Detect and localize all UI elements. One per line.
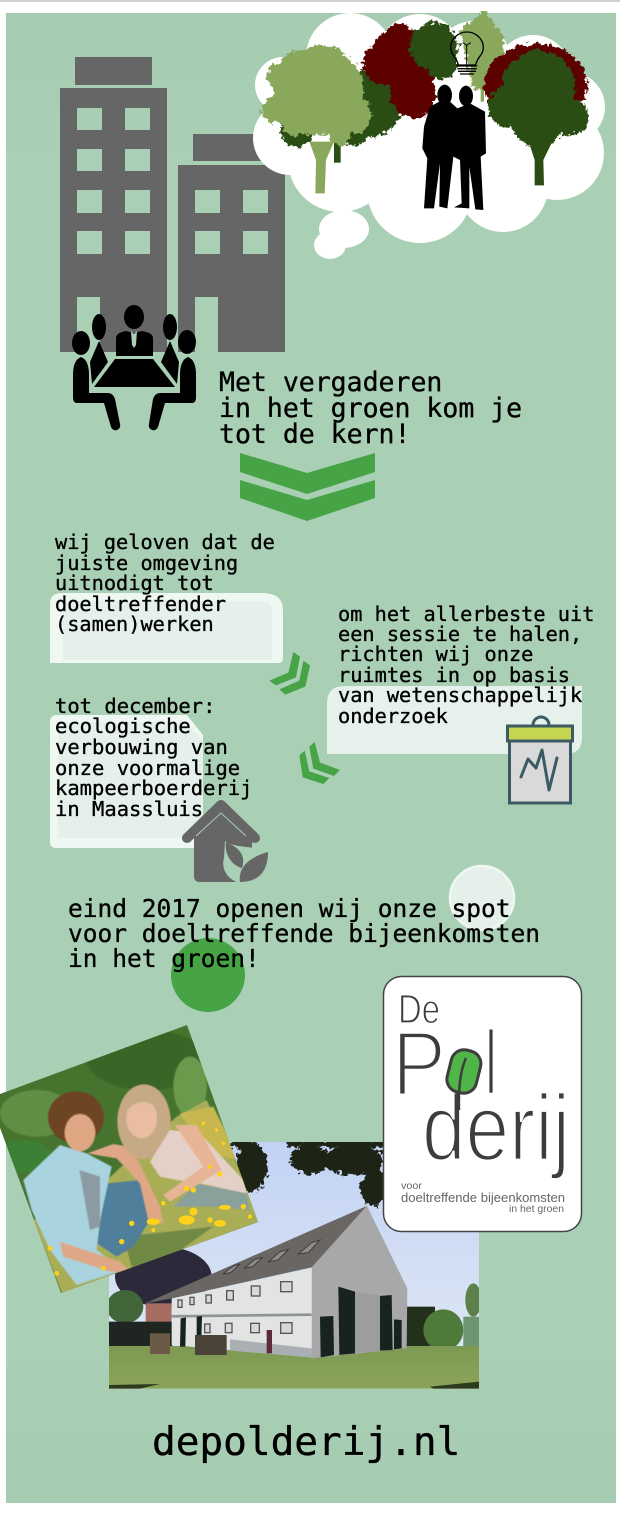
logo letter: P: P [392, 1013, 446, 1115]
text block: wetenschappelijk onderzoek: onderzoek [338, 704, 448, 728]
tree: dark red [363, 23, 436, 118]
windows [178, 1282, 292, 1333]
icon: eco house [187, 805, 268, 883]
text block: opening: in het groen! [68, 944, 260, 973]
logo tagline [401, 1181, 565, 1215]
tree: dark red right [484, 43, 588, 127]
arrow: small chevron right-down [269, 652, 310, 695]
text block: wetenschappelijk onderzoek: richten wij onze [338, 642, 533, 666]
tree: light green conifer [460, 11, 505, 102]
man's arms [87, 1144, 163, 1223]
tree: dark green top [410, 22, 458, 79]
decorative circle: green [171, 938, 245, 1012]
text block: verbouwing: onze voormalige [55, 756, 240, 780]
text block: verbouwing: in Maassluis [55, 797, 203, 821]
dark doors [180, 1287, 402, 1357]
logo word: De: De [398, 986, 440, 1032]
photo: farmhouse [107, 1140, 481, 1389]
roof lights [223, 1240, 320, 1274]
text block: juiste omgeving: doeltreffender [55, 592, 226, 616]
top [150, 1130, 247, 1193]
website url: depolderij.nl [152, 1419, 460, 1465]
heading: Met vergaderen [219, 367, 442, 398]
flowers [48, 1122, 252, 1276]
foliage top [230, 1140, 386, 1207]
text block: juiste omgeving: juiste omgeving [55, 551, 238, 575]
photo: couple in meadow [0, 1025, 258, 1293]
callout background: verbouwing [50, 715, 203, 848]
man's hair [48, 1091, 104, 1143]
tree: light green front [262, 46, 372, 193]
text block: opening [68, 894, 540, 973]
lawn [109, 1346, 479, 1389]
tree: dark green back left [280, 70, 403, 163]
text block: opening: voor doeltreffende bijeenkomsten [68, 919, 540, 948]
brick annex and fence [109, 1303, 172, 1347]
text block: juiste omgeving: wij geloven dat de [55, 530, 275, 554]
figures [23, 1084, 250, 1285]
icon: meeting around a table [72, 305, 196, 430]
heading [219, 367, 522, 450]
text block: wetenschappelijk onderzoek: een sessie te halen, [338, 622, 582, 646]
heading: in het groen kom je [219, 393, 522, 424]
roof [145, 1206, 367, 1303]
long white wall [172, 1268, 312, 1357]
hedge [406, 1306, 479, 1346]
silhouette: two men [422, 85, 486, 210]
illustration: trees, men and light bulb [262, 11, 589, 210]
logo tagline: in het groen [509, 1203, 564, 1215]
woman's face [126, 1098, 157, 1138]
callout background: samenwerken [50, 593, 283, 663]
shirt [23, 1145, 123, 1285]
people and terrace [150, 1330, 272, 1355]
text block: wetenschappelijk onderzoek: van wetenschappelijk [338, 683, 582, 707]
text block: verbouwing: ecologische [55, 714, 191, 738]
forest and meadow [0, 1030, 267, 1297]
back trees [107, 1247, 481, 1323]
logo card [384, 976, 582, 1232]
text block: juiste omgeving: (samen)werken [55, 612, 214, 636]
logo leaf [444, 1047, 484, 1110]
decorative circle: white [450, 866, 514, 930]
icon: light bulb [451, 32, 483, 74]
text block: juiste omgeving: uitnodigt tot [55, 571, 214, 595]
woman's hair [117, 1084, 171, 1159]
logo card: l [487, 1015, 495, 1112]
text block: wetenschappelijk onderzoek: ruimtes in op basis [338, 663, 570, 687]
text block: opening: eind 2017 openen wij onze spot [68, 894, 511, 923]
text block: juiste omgeving [55, 530, 275, 636]
logo tagline: voor [401, 1181, 423, 1192]
text block: verbouwing: verbouwing van [55, 735, 228, 759]
man's face [65, 1114, 95, 1151]
logo tagline: doeltreffende bijeenkomsten [401, 1191, 565, 1205]
arrow: small chevron left-down [299, 742, 340, 784]
icon: flip chart [508, 717, 572, 803]
text block: verbouwing: tot december: [55, 694, 215, 718]
callout background: onderzoek [327, 686, 582, 754]
arrow: large double chevron [240, 453, 375, 521]
heading: tot de kern! [219, 419, 410, 450]
text block: wetenschappelijk onderzoek [338, 602, 594, 728]
text block: verbouwing [55, 694, 252, 821]
woman's arm [163, 1125, 222, 1202]
logo word: derij: derij [422, 1075, 570, 1180]
text block: wetenschappelijk onderzoek: om het allerbeste uit [338, 602, 594, 626]
thought cloud [253, 13, 605, 259]
gable wall [312, 1205, 407, 1358]
jeans [97, 1180, 150, 1257]
icon: office buildings [60, 57, 285, 352]
barn door [355, 1292, 380, 1353]
tree: dark green right [488, 51, 589, 185]
text block: verbouwing: kampeerboerderij [55, 776, 252, 800]
